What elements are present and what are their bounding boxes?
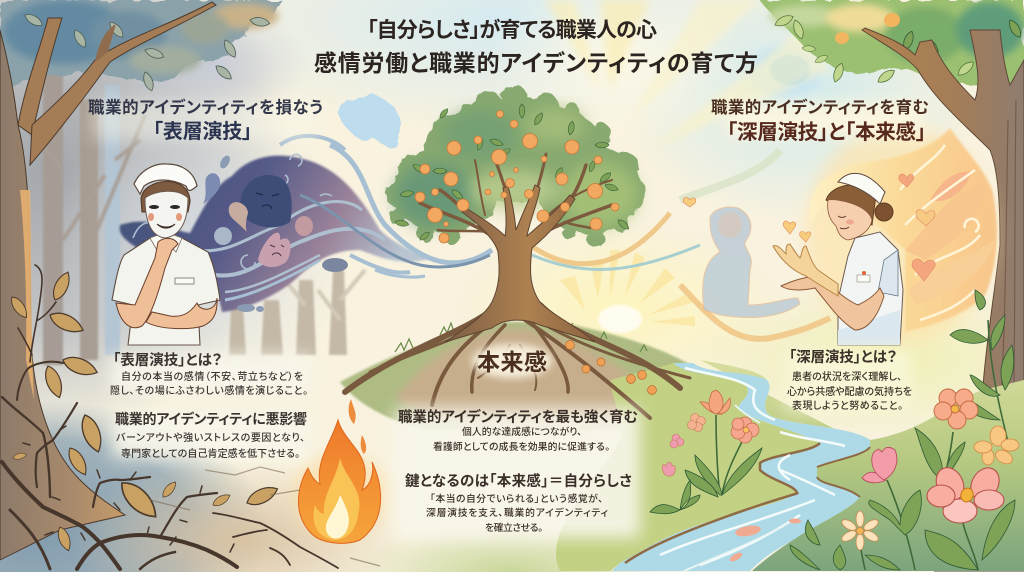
name badge (175, 278, 194, 284)
left tree foliage (0, 0, 282, 92)
lighter swirl bands (133, 154, 385, 292)
right river bank (700, 360, 1024, 571)
ribbons to tree (225, 136, 492, 300)
root fruit (566, 340, 656, 394)
stems and foliage (716, 320, 1010, 570)
heading: surface acting: 「表層演技」 (153, 120, 252, 143)
forest background left (30, 70, 365, 365)
nurse caring with closed eyes (773, 173, 903, 345)
left tree with foliage (0, 0, 282, 560)
text glow panels (92, 100, 925, 538)
text: strongest growth: 看護師としての成長を効果的に促進する。 (433, 440, 610, 453)
sun rays top (545, 0, 830, 150)
patient silhouette (703, 207, 800, 317)
hearts (683, 174, 935, 281)
small flowers (662, 414, 706, 476)
left river bank (556, 363, 820, 571)
central tree (345, 86, 700, 418)
heading: deep acting: 職業的アイデンティティを育む (711, 97, 929, 117)
dark emotion smoke behind masked nurse (120, 136, 492, 312)
right tree foliage (760, 0, 1024, 86)
trunk and main branches (445, 185, 595, 342)
title: 感情労働と職業的アイデンティティの育て方 (314, 50, 758, 76)
text: key is authenticity: 鍵となるのは「本来感」＝自分らしさ (405, 472, 632, 490)
flame (292, 399, 388, 543)
nurse wearing smiling mask (112, 164, 220, 345)
nurse cap (134, 164, 197, 194)
uniform (112, 238, 220, 345)
title: 「自分らしさ」が育てる職業人の心 (367, 18, 657, 42)
fruit (415, 110, 619, 243)
coral flower (731, 417, 759, 443)
uniform (838, 232, 903, 345)
yellow flower (974, 426, 1019, 467)
flowers and plants right side (650, 290, 1019, 570)
label: authenticity roots: 本来感 (477, 349, 547, 375)
ghost: large sad face (240, 175, 292, 227)
right tree with foliage (760, 0, 1024, 571)
sun (560, 250, 695, 333)
title (314, 18, 758, 76)
text: what is surface acting: 自分の本当の感情（不安、苛立ちなど）を (121, 370, 303, 383)
heading: surface acting: 職業的アイデンティティを損なう (88, 97, 323, 117)
text: negative influence (115, 411, 307, 460)
text: key is authenticity: 深層演技を支え、職業的アイデンティティ (426, 506, 608, 519)
heading: surface acting (88, 97, 323, 143)
thorny vines and dry leaves (2, 265, 338, 569)
hair (826, 185, 876, 225)
text: strongest growth (398, 408, 638, 453)
thin branches (420, 154, 612, 240)
crown (385, 86, 646, 247)
pink tulip (862, 447, 897, 483)
meadow and river (556, 360, 1024, 571)
arms and hands (781, 276, 884, 330)
text: what is deep acting (787, 348, 912, 412)
text: strongest growth: 個人的な達成感につながり、 (462, 425, 582, 438)
river (612, 363, 870, 571)
orange blossom (934, 389, 978, 429)
arms (146, 298, 217, 329)
cap (838, 173, 885, 204)
daisy (840, 511, 880, 550)
text: what is surface acting: 隠し、その場にふさわしい感情を演じること。 (110, 384, 308, 397)
badge (857, 275, 870, 282)
small ghosts (203, 154, 348, 312)
text: what is deep acting: 患者の状況を深く理解し、 (792, 370, 902, 383)
ribbon to tree right (532, 213, 700, 269)
text: key is authenticity (405, 472, 632, 534)
text: negative influence: バーンアウトや強いストレスの要因となり、 (116, 431, 305, 444)
large pink flower (927, 463, 1005, 523)
text: what is deep acting: 表現しようと努めること。 (792, 399, 903, 412)
text: negative influence: 専門家としての自己肯定感を低下させる。 (121, 447, 300, 460)
heading: deep acting: 「深層演技」と「本来感」 (727, 120, 926, 144)
cracked ground (150, 467, 380, 566)
ghost: pink sad face (258, 233, 291, 267)
text: strongest growth: 職業的アイデンティティを最も強く育む (398, 408, 638, 426)
face (828, 200, 872, 240)
heading: deep acting (711, 97, 929, 144)
warm golden aura behind caring nurse (680, 125, 997, 345)
orange tulip (700, 390, 730, 414)
hill and soil (340, 321, 730, 431)
text: what is surface acting (110, 351, 308, 397)
text: what is deep acting: 心から共感や配慮の気持ちを (787, 385, 912, 398)
hair (141, 181, 190, 212)
tree leaves (394, 104, 631, 242)
roots (345, 305, 690, 418)
text: negative influence: 職業的アイデンティティに悪影響 (115, 411, 307, 427)
text: what is surface acting: 「表層演技」とは？ (113, 351, 222, 369)
text: what is deep acting: 「深層演技」とは？ (789, 348, 897, 366)
text: key is authenticity: を確立させる。 (485, 521, 543, 534)
text: key is authenticity: 「本当の自分でいられる」という感覚が、 (430, 492, 603, 505)
mask (145, 191, 188, 238)
